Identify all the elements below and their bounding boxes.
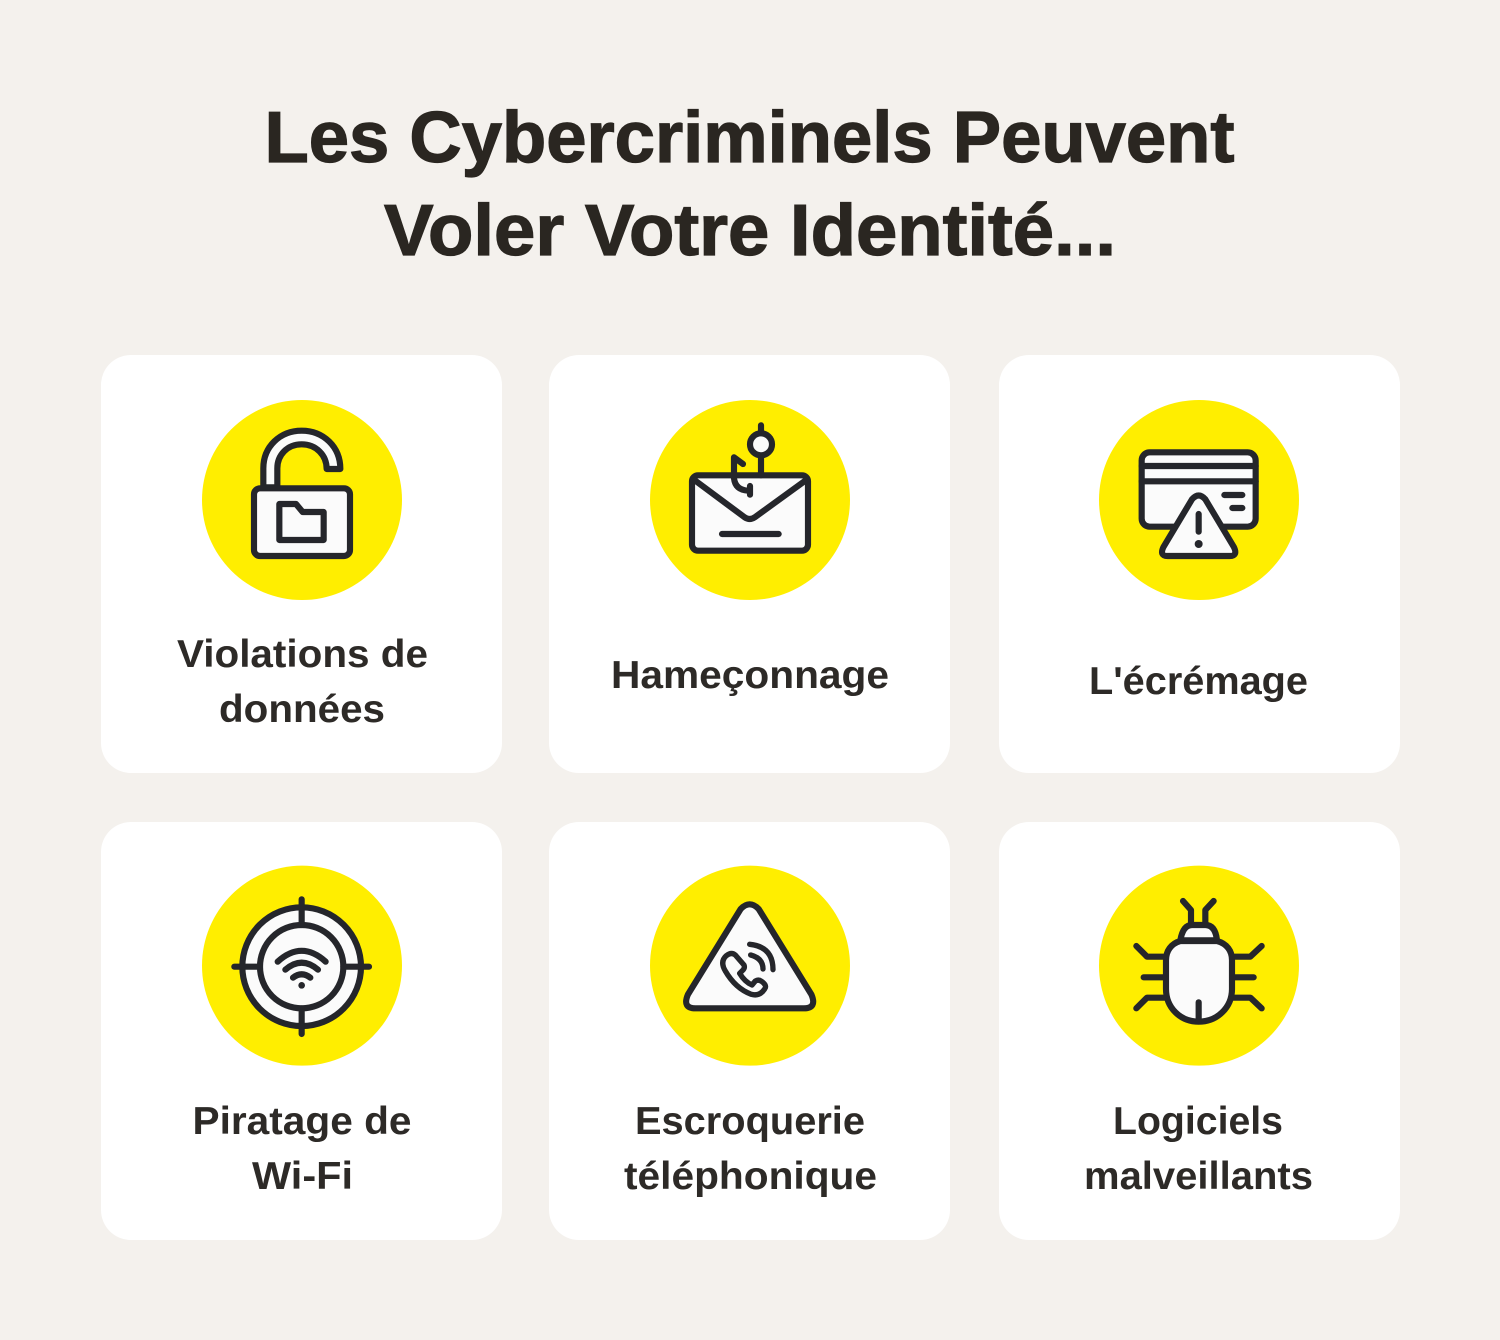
label: violations de données bbox=[177, 633, 428, 731]
label: escroquerie téléphonique: Escroquerie bbox=[635, 1100, 865, 1143]
label: escroquerie téléphonique bbox=[624, 1100, 877, 1198]
label: piratage de wi-fi bbox=[192, 1100, 412, 1198]
label: logiciels malveillants: Logiciels bbox=[1113, 1100, 1283, 1143]
label: logiciels malveillants bbox=[1084, 1100, 1313, 1198]
icon: phone in warning triangle bbox=[650, 866, 850, 1066]
panel: hameçonnage bbox=[549, 355, 950, 773]
label: piratage de wi-fi: Piratage de bbox=[192, 1100, 412, 1143]
title: Les Cybercriminels Peuvent bbox=[264, 98, 1235, 178]
label: hameçonnage: Hameçonnage bbox=[611, 654, 889, 697]
title: Voler Votre Identité... bbox=[384, 191, 1116, 271]
label: l'écrémage: L'écrémage bbox=[1089, 660, 1308, 703]
label: logiciels malveillants: malveillants bbox=[1084, 1155, 1313, 1198]
icon: envelope with fishing hook bbox=[650, 400, 850, 600]
icon: wifi in target crosshair bbox=[202, 866, 402, 1066]
label: piratage de wi-fi: Wi-Fi bbox=[252, 1155, 353, 1198]
panel: piratage de wi-fi bbox=[101, 822, 502, 1240]
icon: bug bbox=[1099, 866, 1299, 1066]
label: escroquerie téléphonique: téléphonique bbox=[624, 1155, 877, 1198]
panel: l'écrémage bbox=[999, 355, 1400, 773]
panel: logiciels malveillants bbox=[999, 822, 1400, 1240]
label: violations de données: données bbox=[219, 688, 385, 731]
label: violations de données: Violations de bbox=[177, 633, 428, 676]
title bbox=[264, 98, 1235, 271]
icon: open padlock with folder bbox=[202, 400, 402, 600]
panel: violations de données bbox=[101, 355, 502, 773]
icon: credit card with warning triangle bbox=[1099, 400, 1299, 600]
panel: escroquerie téléphonique bbox=[549, 822, 950, 1240]
